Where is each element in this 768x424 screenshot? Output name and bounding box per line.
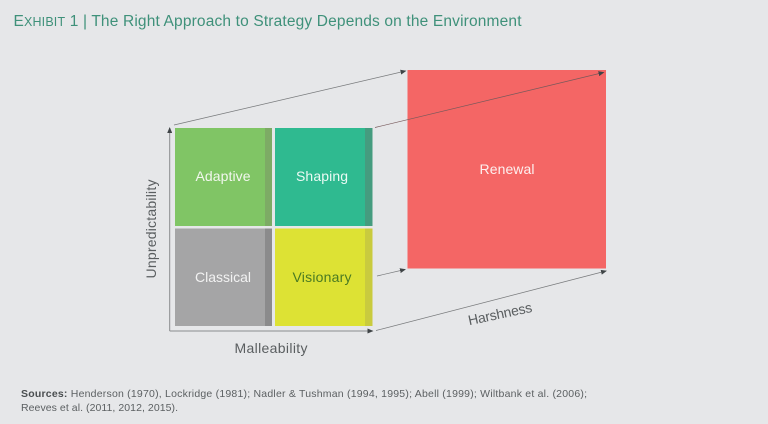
panel: Classical quadrant: Classical (195, 269, 251, 285)
panel: Renewal (408, 70, 606, 268)
arrow: unpredictability axis (169, 128, 171, 331)
arrow: projection top right (375, 72, 604, 128)
arrow: malleability axis (170, 330, 372, 332)
arrow: harshness (376, 271, 606, 330)
axis label: Malleability: Malleability (234, 340, 308, 356)
sources note (21, 388, 587, 414)
sources note: Sources: Henderson (1970), Lockridge (1981); Nadler & Tushman (1994, 1995); Abell (1999); Wiltbank et al. (2006); (21, 388, 587, 400)
panel: Classical quadrant (175, 228, 272, 326)
axis label: Unpredictability: Unpredictability (143, 180, 159, 278)
axis label: Harshness: Harshness (467, 299, 533, 328)
panel: Visionary quadrant (275, 228, 372, 326)
panel: Shaping quadrant (275, 128, 372, 226)
panel: Adaptive quadrant: Adaptive (196, 168, 251, 184)
sources note: Reeves et al. (2011, 2012, 2015). (21, 402, 178, 414)
panel: Visionary quadrant: Visionary (292, 269, 352, 285)
arrow: projection top left (174, 71, 406, 125)
panel: Adaptive quadrant (175, 128, 272, 226)
panel: Shaping quadrant: Shaping (296, 168, 348, 184)
title: EXHIBIT 1 | The Right Approach to Strategy Depends on the Environment (14, 13, 522, 30)
arrow: projection middle (377, 270, 405, 276)
panel: Renewal: Renewal (480, 161, 534, 177)
